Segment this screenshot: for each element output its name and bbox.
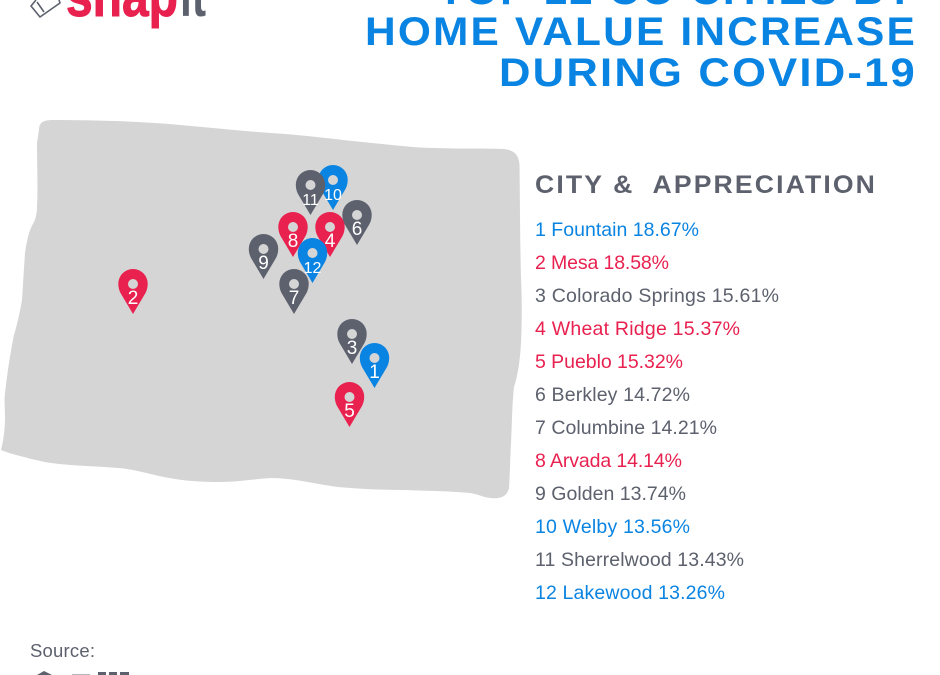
ranked city list: 11 Sherrelwood 13.43% bbox=[535, 549, 744, 571]
ranked city list: 5 Pueblo 15.32% bbox=[535, 351, 683, 373]
ranked city list: 1 Fountain 18.67% bbox=[535, 219, 699, 241]
pin 5 bbox=[335, 382, 364, 427]
logo: snapit bbox=[31, 0, 206, 29]
pin 2: 2 bbox=[128, 288, 138, 309]
pin 10: 10 bbox=[324, 187, 342, 204]
pin 3 bbox=[337, 319, 367, 364]
pin 3: 3 bbox=[347, 338, 357, 359]
ranked city list: 10 Welby 13.56% bbox=[535, 516, 690, 538]
pin 5: 5 bbox=[344, 401, 355, 422]
ranked city list: 2 Mesa 18.58% bbox=[535, 252, 669, 274]
pin 8: 8 bbox=[288, 231, 298, 252]
pin 9 bbox=[249, 234, 278, 279]
pin 12: 12 bbox=[304, 260, 322, 277]
pin 6: 6 bbox=[352, 219, 362, 240]
pin 10 bbox=[318, 165, 348, 210]
pin 1 bbox=[360, 343, 389, 388]
title: HOME VALUE INCREASE bbox=[365, 10, 917, 54]
ranked city list: 9 Golden 13.74% bbox=[535, 483, 686, 505]
map: Colorado with pins bbox=[1, 120, 522, 498]
pin 11 bbox=[296, 170, 325, 215]
pin 1: 1 bbox=[369, 362, 380, 383]
ranked city list: 7 Columbine 14.21% bbox=[535, 417, 717, 439]
pin 4 bbox=[315, 212, 345, 257]
pin 11: 11 bbox=[302, 192, 319, 209]
pin 12 bbox=[298, 238, 327, 283]
ranked city list: 8 Arvada 14.14% bbox=[535, 450, 682, 472]
ranked city list: 12 Lakewood 13.26% bbox=[535, 582, 725, 604]
pin 8 bbox=[278, 212, 308, 257]
pin 9: 9 bbox=[258, 253, 269, 274]
source label: Source: bbox=[30, 640, 95, 661]
source logo, cropped at page edge bbox=[37, 671, 129, 675]
pin 6 bbox=[342, 200, 372, 245]
pin 7: 7 bbox=[289, 288, 299, 309]
ranked city list: 3 Colorado Springs 15.61% bbox=[535, 285, 779, 307]
ranked city list bbox=[535, 219, 779, 604]
ranked city list: 6 Berkley 14.72% bbox=[535, 384, 690, 406]
ranked city list: 4 Wheat Ridge 15.37% bbox=[535, 318, 740, 340]
heading: city and appreciation: CITY & APPRECIATION bbox=[535, 171, 877, 199]
pin 7 bbox=[279, 269, 309, 314]
pin 2 bbox=[118, 269, 148, 314]
icon: eraser bbox=[31, 0, 60, 17]
state shape bbox=[1, 120, 522, 498]
title: DURING COVID-19 bbox=[499, 51, 917, 95]
title bbox=[365, 0, 917, 95]
pin 4: 4 bbox=[325, 231, 336, 252]
